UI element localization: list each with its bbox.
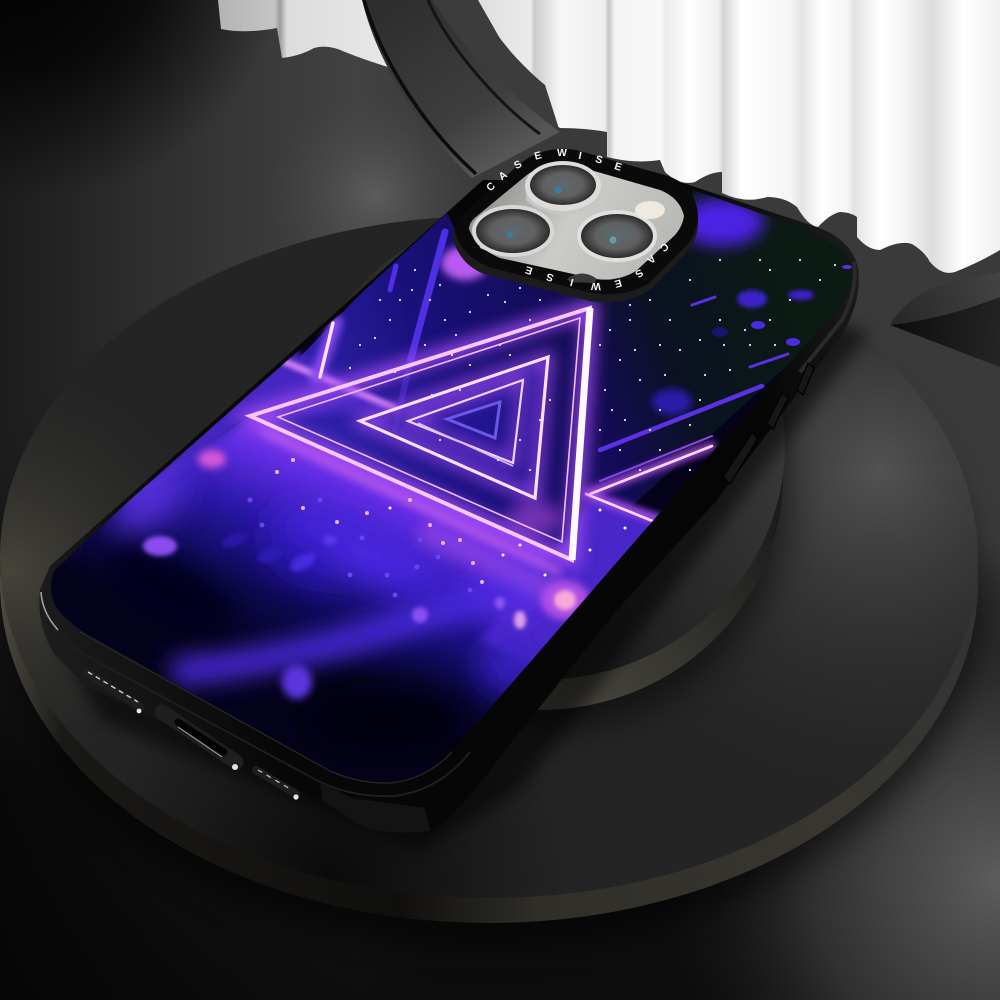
floor blue glow: [101, 452, 555, 691]
brand text: CASEWISE top edge: W: [557, 147, 567, 159]
top right glow: [652, 198, 852, 415]
large round platform: [0, 218, 986, 923]
brand text: CASEWISE top edge: [484, 147, 623, 194]
small round riser: [295, 210, 790, 730]
right floor lines: [586, 436, 712, 528]
sensor: [567, 274, 597, 283]
outer triangle: [250, 308, 590, 560]
phone artwork: neon triangles: [30, 180, 860, 800]
pink glow inside triangle corner: [507, 502, 563, 534]
star particles: [350, 255, 835, 470]
arched stand: [362, 0, 560, 178]
left corner highlight: [41, 592, 58, 630]
floor particles: [250, 500, 470, 595]
lens: top: [525, 161, 602, 215]
right floor: [479, 496, 662, 666]
white floor sparkles: [390, 508, 625, 575]
left floor wedge: [128, 348, 386, 502]
speaker grille right: [256, 770, 299, 800]
screen bottom bevel: [80, 632, 452, 783]
lens: left: [472, 205, 554, 257]
camera bump: [453, 147, 698, 302]
phone shadow: [60, 300, 870, 850]
brand text: CASEWISE bottom edge: C: [657, 240, 671, 254]
brand text: CASEWISE bottom edge: W: [591, 280, 601, 292]
case body: [39, 180, 859, 833]
flash: [635, 201, 665, 219]
brand text: CASEWISE bottom edge: S: [633, 266, 645, 280]
brand text: CASEWISE bottom edge: I: [569, 276, 575, 288]
right edge sheen: [800, 262, 855, 372]
fourth triangle: [408, 380, 523, 463]
phone case: [39, 180, 859, 833]
brand text: CASEWISE top edge: E: [533, 149, 543, 163]
dark bottom: [300, 684, 470, 756]
triangle glow: [250, 308, 590, 560]
innermost triangle: [447, 402, 500, 438]
bump shadow edge: [453, 153, 698, 302]
speaker grille left: [86, 672, 141, 713]
brand text: CASEWISE top edge: A: [496, 169, 510, 183]
right stand foot: [890, 272, 1000, 367]
light ray: [173, 575, 550, 672]
brand text: CASEWISE top edge: S: [594, 153, 604, 167]
case bottom corner sheen: [320, 782, 430, 833]
bright floor sparkles: [277, 460, 482, 582]
second triangle: [278, 318, 580, 542]
bump ring: [455, 149, 698, 294]
brand text: CASEWISE bottom edge: S: [545, 270, 555, 284]
case edge highlight: [42, 610, 470, 796]
triangle interior fill: [391, 360, 546, 496]
brand text: CASEWISE bottom edge: A: [644, 252, 658, 266]
floor dark patch: [100, 534, 244, 625]
brand text: CASEWISE top edge: S: [512, 158, 524, 172]
brand text: CASEWISE top edge: C: [484, 180, 498, 194]
side buttons: [723, 363, 814, 484]
third triangle: [360, 357, 548, 498]
charging port: [162, 712, 238, 770]
brand text: CASEWISE top edge: I: [577, 150, 583, 162]
upper backdrop: [240, 180, 860, 560]
curtain: top left: [218, 0, 388, 67]
lower floor: [64, 418, 594, 737]
brand text: CASEWISE bottom edge: E: [524, 263, 534, 277]
background light beams: [285, 232, 788, 450]
bokeh lights: [143, 246, 589, 699]
brand text: CASEWISE bottom edge: E: [613, 276, 623, 290]
neon triangles: [250, 308, 590, 560]
brand text: CASEWISE bottom edge: [524, 240, 671, 292]
lens: right: [577, 210, 657, 264]
glass window: [469, 163, 684, 280]
pink floor reflection: [262, 430, 560, 572]
brand text: CASEWISE top edge: E: [613, 160, 623, 174]
curtain: top right: [478, 0, 1000, 273]
lower floor pink haze: [420, 530, 560, 595]
